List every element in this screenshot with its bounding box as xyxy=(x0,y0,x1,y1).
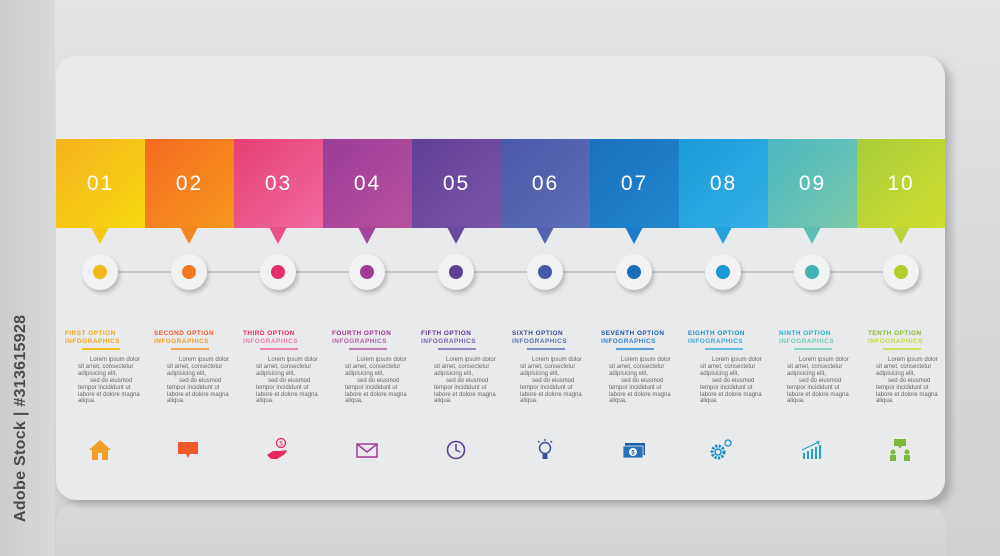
text: INFOGRAPHICS xyxy=(868,338,923,344)
text: tempor incididunt ut xyxy=(256,385,308,391)
text: 07 xyxy=(621,172,648,195)
text: labore et dolore magna xyxy=(520,392,582,398)
card panel xyxy=(56,56,945,500)
left strip with watermark text xyxy=(0,0,55,556)
text: labore et dolore magna xyxy=(256,392,318,398)
text: 04 xyxy=(354,172,381,195)
text: labore et dolore magna xyxy=(78,392,140,398)
text: adipisicing elit, xyxy=(876,371,915,377)
text: Lorem ipsum dolor xyxy=(268,357,318,363)
text: 01 xyxy=(87,172,114,195)
text: aliqua. xyxy=(434,398,452,404)
text: Lorem ipsum dolor xyxy=(446,357,496,363)
timeline line xyxy=(100,271,900,273)
text: labore et dolore magna xyxy=(700,392,762,398)
text: sed do eiusmod xyxy=(799,378,841,384)
text: aliqua. xyxy=(520,398,538,404)
text: sed do eiusmod xyxy=(446,378,488,384)
text: 06 xyxy=(532,172,559,195)
text: Lorem ipsum dolor xyxy=(179,357,229,363)
text: Lorem ipsum dolor xyxy=(888,357,938,363)
step 05 xyxy=(412,139,501,460)
text: 08 xyxy=(710,172,737,195)
text: TENTH OPTION xyxy=(868,330,922,337)
text: SIXTH OPTION xyxy=(512,330,563,337)
text: tempor incididunt ut xyxy=(167,385,219,391)
text: labore et dolore magna xyxy=(167,392,229,398)
text: sit amet, consectetur xyxy=(520,364,575,370)
text: INFOGRAPHICS xyxy=(779,338,834,344)
text: 02 xyxy=(176,172,203,195)
text: sed do eiusmod xyxy=(90,378,132,384)
text: aliqua. xyxy=(609,398,627,404)
text: adipisicing elit, xyxy=(609,371,648,377)
text: tempor incididunt ut xyxy=(609,385,661,391)
text: Lorem ipsum dolor xyxy=(90,357,140,363)
text: aliqua. xyxy=(78,398,96,404)
left strip with watermark text: Adobe Stock | #313615928 xyxy=(12,315,29,522)
step 01 xyxy=(56,139,145,460)
text: 09 xyxy=(799,172,826,195)
text: sit amet, consectetur xyxy=(700,364,755,370)
step 09 xyxy=(768,139,857,459)
step 02 xyxy=(145,139,234,458)
text: adipisicing elit, xyxy=(434,371,473,377)
step 06 xyxy=(501,139,590,459)
text: Lorem ipsum dolor xyxy=(357,357,407,363)
text: Lorem ipsum dolor xyxy=(712,357,762,363)
text: sit amet, consectetur xyxy=(78,364,133,370)
text: labore et dolore magna xyxy=(434,392,496,398)
text: EIGHTH OPTION xyxy=(688,330,745,337)
text: Lorem ipsum dolor xyxy=(621,357,671,363)
text: INFOGRAPHICS xyxy=(65,338,120,344)
text: FOURTH OPTION xyxy=(332,330,391,337)
step 08 xyxy=(679,139,768,460)
text: FIRST OPTION xyxy=(65,330,116,337)
text: sed do eiusmod xyxy=(888,378,930,384)
text: aliqua. xyxy=(167,398,185,404)
text: tempor incididunt ut xyxy=(345,385,397,391)
text: THIRD OPTION xyxy=(243,330,295,337)
text: sit amet, consectetur xyxy=(787,364,842,370)
step 03 xyxy=(234,139,323,459)
text: labore et dolore magna xyxy=(787,392,849,398)
text: INFOGRAPHICS xyxy=(688,338,743,344)
text: 10 xyxy=(887,172,915,195)
text: tempor incididunt ut xyxy=(787,385,839,391)
text: SECOND OPTION xyxy=(154,330,214,337)
text: $ xyxy=(279,442,283,448)
text: sit amet, consectetur xyxy=(256,364,311,370)
text: adipisicing elit, xyxy=(520,371,559,377)
text: tempor incididunt ut xyxy=(78,385,130,391)
text: adipisicing elit, xyxy=(345,371,384,377)
text: INFOGRAPHICS xyxy=(332,338,387,344)
text: 05 xyxy=(443,172,470,195)
step 07 xyxy=(590,139,679,458)
text: FIFTH OPTION xyxy=(421,330,471,337)
card reflection xyxy=(56,503,945,556)
text: labore et dolore magna xyxy=(609,392,671,398)
text: sit amet, consectetur xyxy=(345,364,400,370)
text: labore et dolore magna xyxy=(876,392,938,398)
step 04 xyxy=(323,139,412,458)
text: SEVENTH OPTION xyxy=(601,330,664,337)
text: sed do eiusmod xyxy=(179,378,221,384)
text: adipisicing elit, xyxy=(256,371,295,377)
text: $ xyxy=(631,450,635,456)
text: tempor incididunt ut xyxy=(434,385,486,391)
text: INFOGRAPHICS xyxy=(243,338,298,344)
text: sed do eiusmod xyxy=(357,378,399,384)
text: INFOGRAPHICS xyxy=(512,338,567,344)
text: sit amet, consectetur xyxy=(434,364,489,370)
text: NINTH OPTION xyxy=(779,330,831,337)
text: INFOGRAPHICS xyxy=(421,338,476,344)
text: labore et dolore magna xyxy=(345,392,407,398)
text: aliqua. xyxy=(787,398,805,404)
text: sed do eiusmod xyxy=(532,378,574,384)
text: aliqua. xyxy=(345,398,363,404)
text: adipisicing elit, xyxy=(167,371,206,377)
text: adipisicing elit, xyxy=(700,371,739,377)
text: sed do eiusmod xyxy=(712,378,754,384)
step 10 xyxy=(857,139,945,461)
text: 03 xyxy=(265,172,292,195)
text: aliqua. xyxy=(700,398,718,404)
text: tempor incididunt ut xyxy=(520,385,572,391)
text: tempor incididunt ut xyxy=(876,385,928,391)
text: sed do eiusmod xyxy=(621,378,663,384)
text: sit amet, consectetur xyxy=(609,364,664,370)
text: sit amet, consectetur xyxy=(876,364,931,370)
text: tempor incididunt ut xyxy=(700,385,752,391)
text: Lorem ipsum dolor xyxy=(532,357,582,363)
text: aliqua. xyxy=(256,398,274,404)
text: adipisicing elit, xyxy=(78,371,117,377)
text: sit amet, consectetur xyxy=(167,364,222,370)
text: sed do eiusmod xyxy=(268,378,310,384)
text: INFOGRAPHICS xyxy=(601,338,656,344)
text: adipisicing elit, xyxy=(787,371,826,377)
text: Lorem ipsum dolor xyxy=(799,357,849,363)
text: INFOGRAPHICS xyxy=(154,338,209,344)
text: aliqua. xyxy=(876,398,894,404)
